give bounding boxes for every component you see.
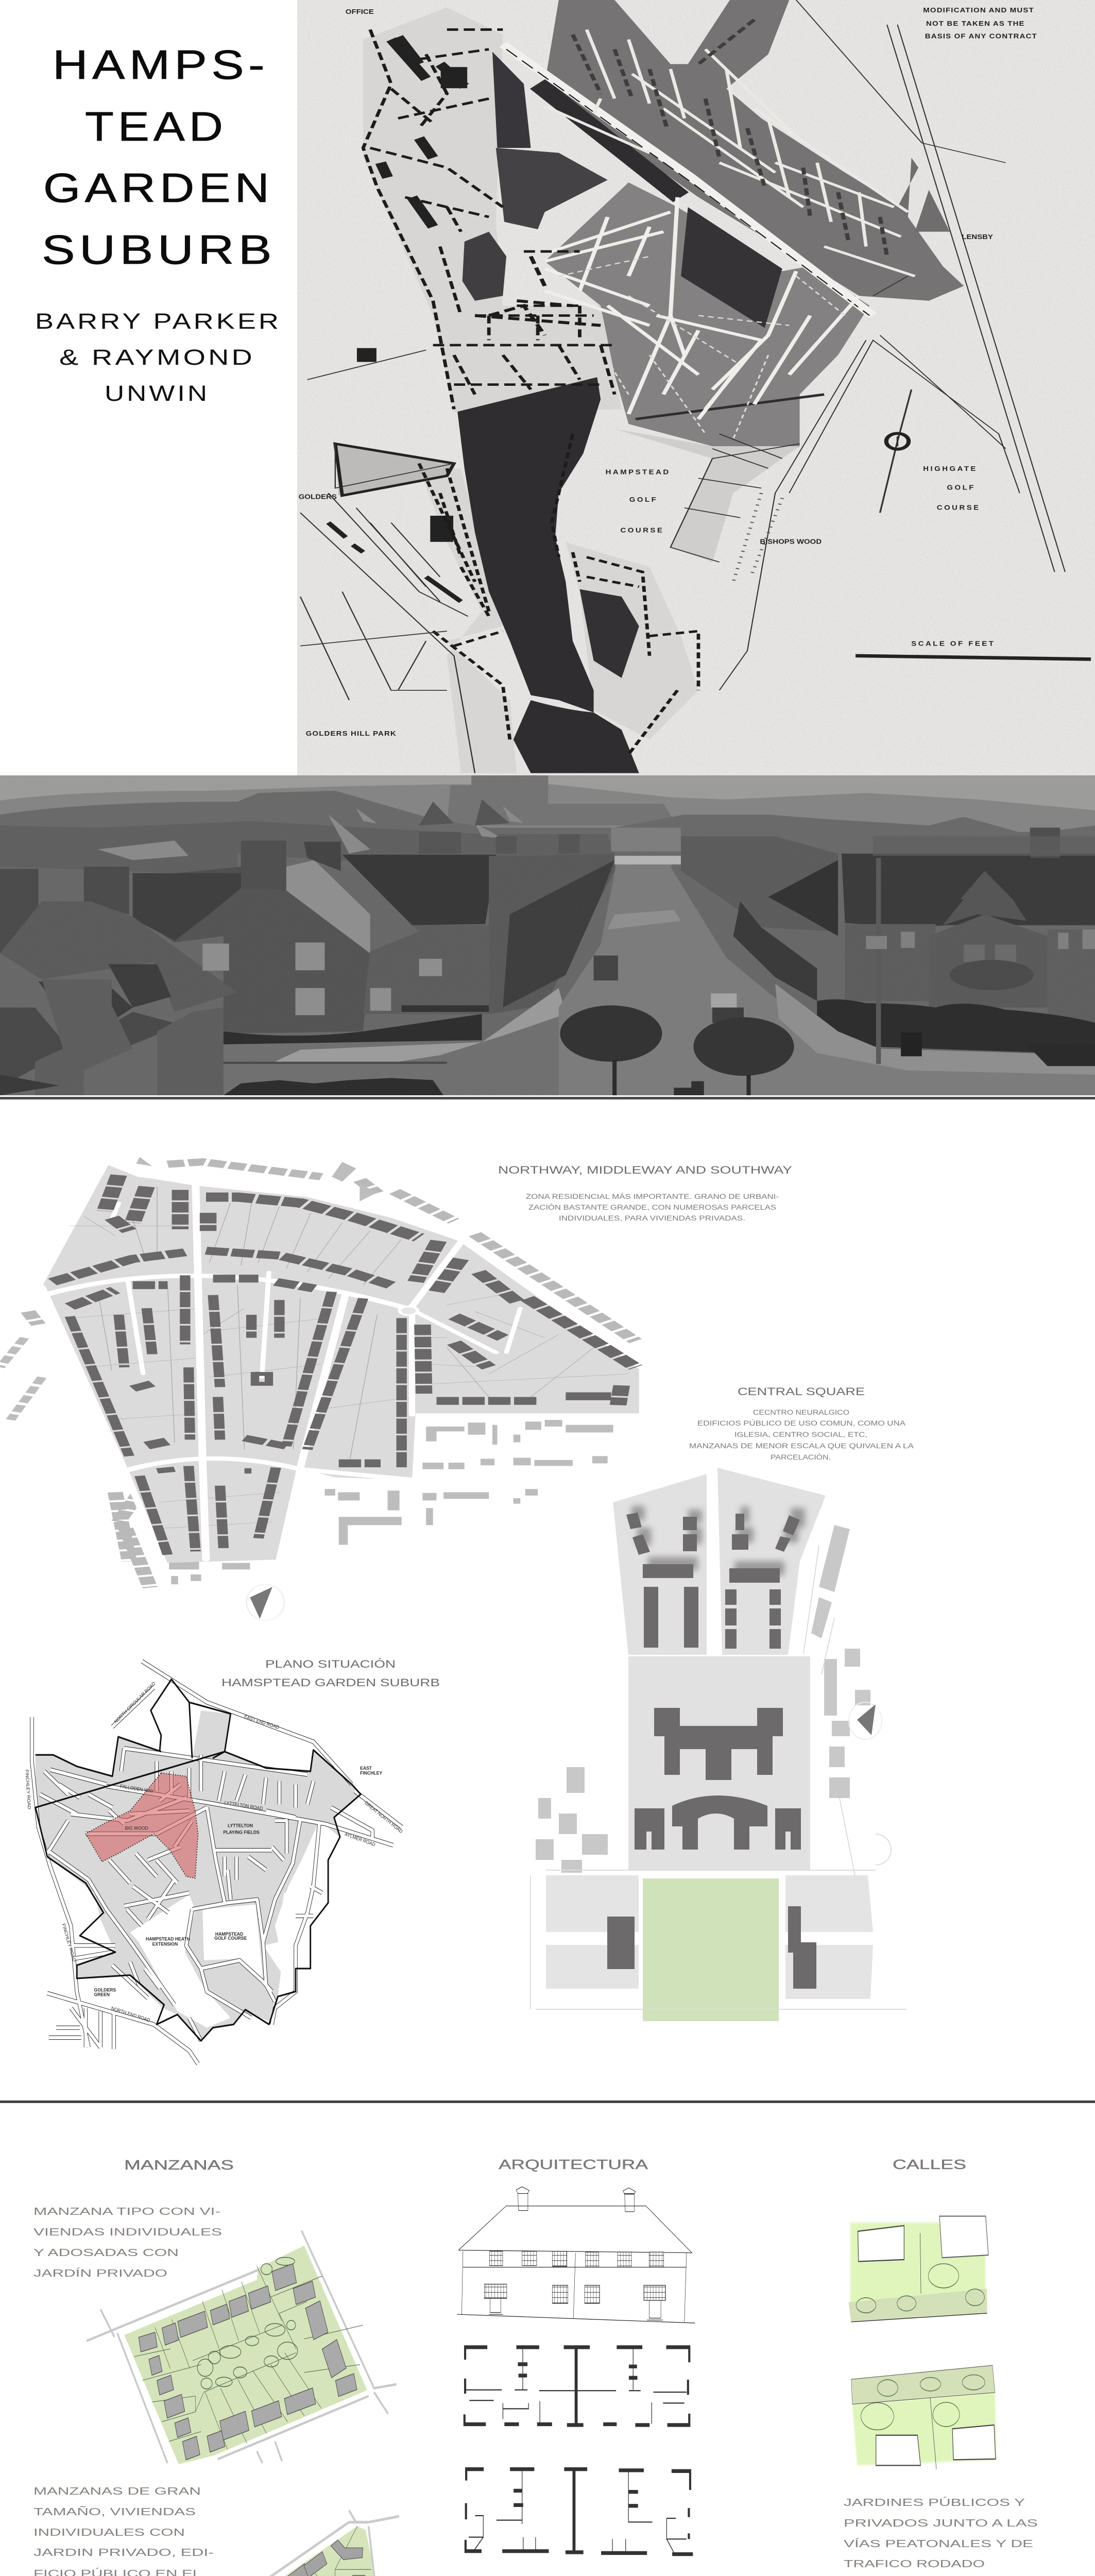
section divider: [0, 2100, 1095, 2103]
street and place labels: GREEN: [94, 1992, 110, 1997]
open spaces: [130, 1821, 340, 2028]
text: manzana tipo: MANZANA TIPO CON VI-: [33, 2206, 220, 2217]
street and place labels: EAST: [360, 1766, 372, 1771]
description: Central Square: PARCELACIÓN.: [771, 1453, 831, 1461]
title: Hampstead Garden Suburb: TEAD: [85, 104, 227, 149]
heading: Northway, Middleway and Southway: NORTHWAY, MIDDLEWAY AND SOUTHWAY: [498, 1164, 792, 1176]
floor plan 1: [465, 2347, 689, 2425]
street and place labels: [24, 1681, 404, 2023]
authors: & RAYMOND: [59, 345, 255, 370]
historic master plan map: GOLF: [629, 496, 658, 503]
description: Central Square: MANZANAS DE MENOR ESCALA QUE QUIVALEN A LA: [689, 1442, 914, 1450]
column headings: MANZANAS: [124, 2157, 234, 2173]
description: Central Square: [689, 1409, 914, 1461]
architecture drawings: upper part: [457, 2187, 771, 2576]
compass arrow: [247, 1584, 284, 1620]
text: manzana tipo: Y ADOSADAS CON: [33, 2247, 179, 2259]
column headings: [124, 2157, 966, 2173]
shadows: [631, 1506, 805, 1575]
street and place labels: LYTTELTON ROAD: [224, 1800, 263, 1811]
heading: Central Square: CENTRAL SQUARE: [738, 1386, 865, 1398]
locator heading: PLANO SITUACIÓN: [265, 1658, 396, 1670]
text: jardines públicos y privados: [844, 2497, 1038, 2570]
compass arrow: [849, 1702, 882, 1739]
title: Hampstead Garden Suburb: [42, 42, 276, 273]
section 1: [849, 2216, 988, 2322]
text: manzanas de gran tamaño: JARDIN PRIVADO, EDI-: [33, 2547, 214, 2558]
left houses: [133, 841, 286, 942]
historic master plan map: [297, 0, 1095, 775]
historic master plan map: GOLDERS: [299, 494, 337, 500]
street and place labels: LYTTELTON: [228, 1823, 253, 1828]
section 2: [851, 2365, 997, 2469]
description: Central Square: IGLESIA, CENTRO SOCIAL, ETC,: [734, 1431, 867, 1438]
street and place labels: NORTH CIRCULAR ROAD: [113, 1681, 157, 1724]
locator heading: [221, 1658, 440, 1689]
title: Hampstead Garden Suburb: SUBURB: [42, 227, 276, 273]
top section divider: [0, 1097, 1095, 1099]
surrounding lighter buildings: [536, 1525, 870, 1873]
historic master plan map: BISHOPS WOOD: [760, 538, 822, 545]
parcel lines: [70, 1187, 628, 1529]
central green square: [643, 1878, 779, 2021]
title: Hampstead Garden Suburb: GARDEN: [43, 165, 273, 211]
upper wedge blocks: [546, 1468, 873, 1999]
locator map: [24, 1661, 404, 2064]
painting: street view of the suburb: [0, 775, 1095, 1095]
block plan 2: [56, 2511, 416, 2576]
historic master plan map: HIGHGATE: [923, 465, 978, 472]
column headings: ARQUITECTURA: [499, 2157, 648, 2172]
street and place labels: FINCHLEY ROAD: [24, 1769, 32, 1810]
buildings: [607, 1513, 816, 1989]
historic master plan map: GOLF: [947, 484, 976, 491]
road network: [32, 1661, 402, 2064]
historic master plan map: NOT BE TAKEN AS THE: [926, 20, 1025, 27]
text: manzanas de gran tamaño: MANZANAS DE GRAN: [33, 2486, 201, 2497]
authors: [35, 309, 281, 406]
text: manzana tipo: JARDÍN PRIVADO: [33, 2267, 167, 2279]
street and place labels: PLAYING FIELDS: [223, 1829, 260, 1835]
residential block base: [42, 1165, 641, 1563]
street and place labels: AYLMER ROAD: [344, 1832, 376, 1848]
description: residential area: ZONA RESIDENCIAL MÁS IMPORTANTE. GRANO DE URBANI-: [526, 1193, 779, 1200]
description: residential area: [526, 1193, 779, 1222]
right houses: [681, 836, 838, 931]
authors: UNWIN: [105, 381, 210, 406]
text: manzanas de gran tamaño: [33, 2486, 214, 2576]
historic master plan map: BASIS OF ANY CONTRACT: [925, 33, 1037, 40]
street and place labels: BIG WOOD: [125, 1825, 148, 1831]
description: Central Square: CECNTRO NEURALGICO: [753, 1409, 849, 1416]
bold suburb boundary: [36, 1680, 361, 2041]
street sections: gardens along streets: [849, 2216, 997, 2576]
historic master plan map: COURSE: [937, 504, 981, 511]
site plan: Northway, Middleway and Southway: [0, 1157, 653, 1620]
neighbouring light buildings: [0, 1157, 636, 1587]
street and place labels: FINCHLEY ROAD: [61, 1923, 77, 1962]
white roads: [39, 1163, 653, 1565]
suburb area fill: [36, 1710, 361, 2041]
street and place labels: GOLDERS: [94, 1987, 116, 1993]
street and place labels: EAST END ROAD: [244, 1714, 280, 1730]
central street: [559, 856, 1095, 1095]
block plan 1: [87, 2231, 397, 2464]
road outlines: [531, 1546, 906, 2009]
historic master plan map: COURSE: [620, 527, 664, 534]
elevation: semi-detached houses: [457, 2187, 695, 2323]
text: jardines públicos y privados: TRAFICO RODADO: [844, 2558, 985, 2570]
street and place labels: HAMPSTEAD: [215, 1931, 244, 1937]
site plan: Central Square: [531, 1468, 906, 2021]
historic master plan map: MODIFICATION AND MUST: [923, 7, 1034, 14]
text: jardines públicos y privados: JARDINES PÚBLICOS Y: [844, 2497, 1025, 2509]
historic master plan map: OFFICE: [346, 8, 374, 15]
floor plan 2: [466, 2469, 693, 2554]
title panel: [35, 42, 281, 406]
street and place labels: NORTH END ROAD: [111, 2006, 151, 2023]
description: residential area: INDIVIDUALES, PARA VIVIENDAS PRIVADAS.: [559, 1214, 745, 1222]
historic master plan map: SCALE OF FEET: [911, 640, 995, 647]
street and place labels: EXTENSION: [152, 1941, 178, 1946]
text: manzanas de gran tamaño: INDIVIDUALES CON: [33, 2527, 185, 2538]
street and place labels: FALLODEN WAY: [119, 1784, 154, 1794]
historic master plan map: GOLDERS HILL PARK: [306, 730, 397, 737]
street and place labels: FINCHLEY: [360, 1770, 382, 1776]
title: Hampstead Garden Suburb: HAMPS-: [53, 42, 269, 88]
street and place labels: GREAT NORTH ROAD: [364, 1800, 404, 1835]
historic master plan map: LENSBY: [962, 233, 993, 241]
text: manzana tipo: VIENDAS INDIVIDUALES: [33, 2227, 222, 2238]
description: Central Square: EDIFICIOS PÚBLICO DE USO COMUN, COMO UNA: [697, 1419, 905, 1427]
historic master plan map: HAMPSTEAD: [606, 469, 671, 476]
text: manzanas de gran tamaño: TAMAÑO, VIVIENDAS: [33, 2505, 196, 2518]
text: manzana tipo: [33, 2206, 222, 2279]
authors: BARRY PARKER: [35, 309, 281, 334]
dark building rows: [53, 1175, 636, 1555]
street and place labels: HAMPSTEAD HEATH: [146, 1936, 190, 1942]
text: jardines públicos y privados: VÍAS PEATONALES Y DE: [844, 2538, 1033, 2550]
column headings: CALLES: [893, 2157, 966, 2172]
description: residential area: ZACIÓN BASTANTE GRANDE, CON NUMEROSAS PARCELAS: [528, 1204, 776, 1211]
locator heading: HAMSPTEAD GARDEN SUBURB: [221, 1677, 440, 1689]
highlighted study area: [85, 1773, 198, 1878]
text: jardines públicos y privados: PRIVADOS JUNTO A LAS: [844, 2518, 1038, 2529]
street and place labels: GOLF COURSE: [214, 1935, 247, 1941]
